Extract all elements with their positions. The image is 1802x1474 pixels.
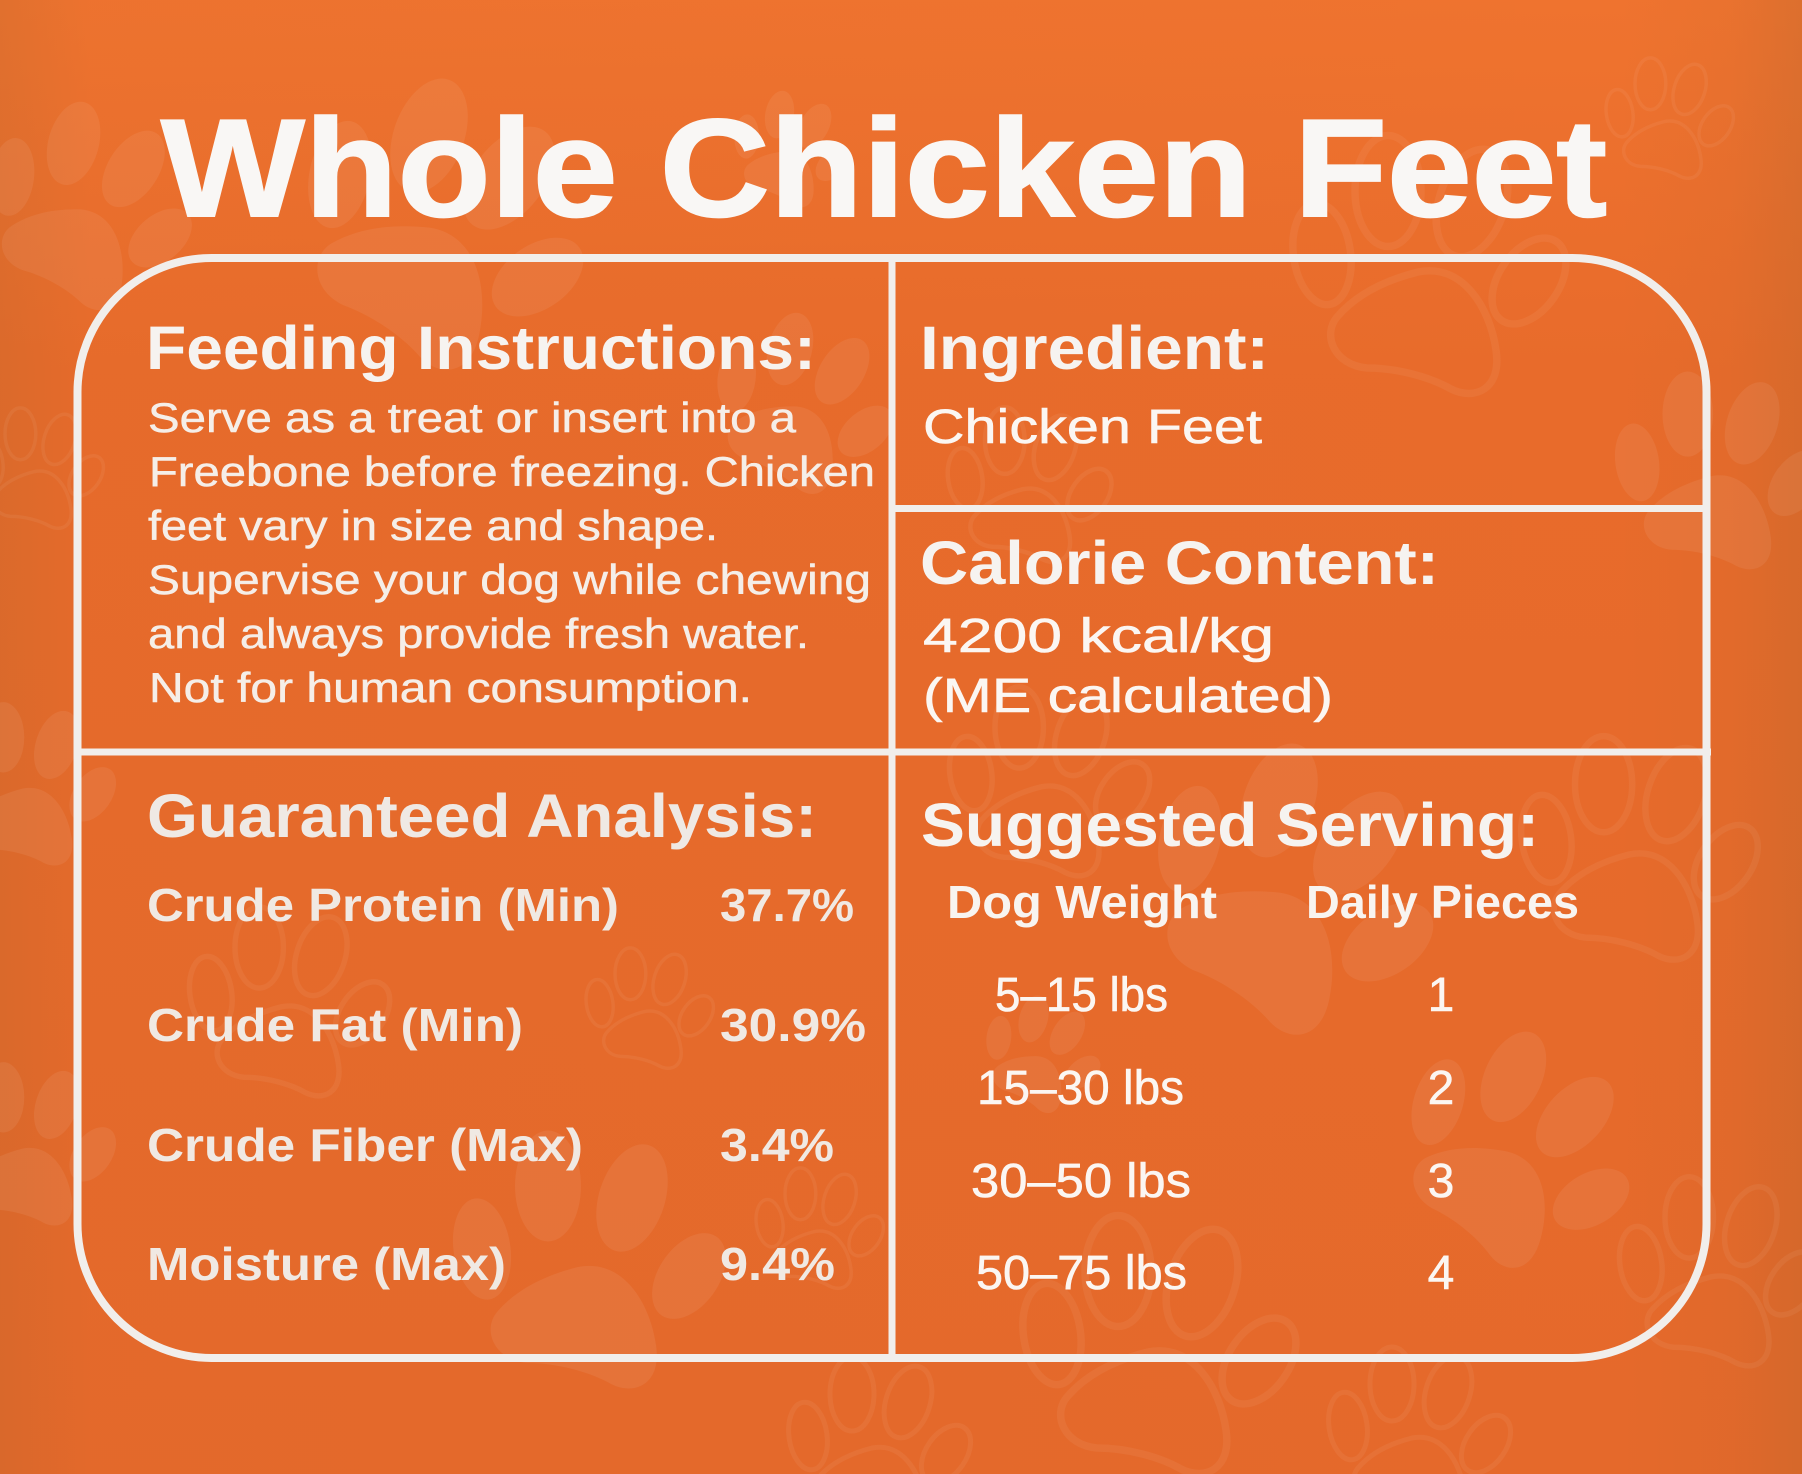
table row: 15-30 lbs (977, 1062, 1454, 1115)
row: moisture: 9.4% (720, 1238, 835, 1290)
table header: Dog Weight (947, 876, 1217, 928)
table row: 30-50 lbs (971, 1155, 1454, 1208)
panel: suggested serving (921, 791, 1579, 1300)
table row: 5-15 lbs: 5–15 lbs (995, 969, 1168, 1022)
table row: 5-15 lbs: 1 (1428, 969, 1454, 1022)
row: moisture (147, 1238, 835, 1290)
row: crude fiber (147, 1119, 834, 1171)
text block: feeding instructions body: and always provide fresh water. (148, 610, 809, 657)
text: chicken feet: Chicken Feet (923, 401, 1262, 454)
row: crude protein: 37.7% (720, 879, 854, 931)
table row: 50-75 lbs: 4 (1428, 1247, 1454, 1300)
title: Whole Chicken Feet (161, 91, 1607, 246)
panel: calorie content (920, 529, 1439, 723)
text block: feeding instructions body: Serve as a treat or insert into a (148, 394, 797, 441)
text block: feeding instructions body: Freebone before freezing. Chicken (149, 448, 875, 495)
text: calorie value (923, 610, 1333, 723)
table row: 50-75 lbs (976, 1247, 1454, 1300)
row: moisture: Moisture (Max) (147, 1238, 506, 1290)
heading: ingredient: Ingredient: (920, 314, 1269, 382)
table row: 30-50 lbs: 30–50 lbs (971, 1155, 1191, 1208)
row: crude fat (147, 999, 866, 1051)
panel frame (74, 258, 1711, 1358)
table header (947, 876, 1579, 928)
text block: feeding instructions body (148, 394, 875, 711)
table row: 50-75 lbs: 50–75 lbs (976, 1247, 1187, 1300)
heading: guaranteed analysis: Guaranteed Analysis: (147, 782, 817, 850)
heading: calorie content: Calorie Content: (920, 529, 1439, 597)
table row: 5-15 lbs (995, 969, 1454, 1022)
table row: 15-30 lbs: 15–30 lbs (977, 1062, 1184, 1115)
row: crude fiber: Crude Fiber (Max) (147, 1119, 583, 1171)
text: calorie value: (ME calculated) (923, 670, 1333, 723)
row: crude fat: Crude Fat (Min) (147, 999, 523, 1051)
row: crude protein: Crude Protein (Min) (147, 879, 619, 931)
text block: feeding instructions body: feet vary in size and shape. (148, 502, 718, 549)
panel: ingredient (920, 314, 1269, 454)
table row: 30-50 lbs: 3 (1428, 1155, 1454, 1208)
panel: feeding instructions (146, 314, 875, 711)
text: calorie value: 4200 kcal/kg (923, 610, 1274, 663)
text block: feeding instructions body: Not for human consumption. (149, 664, 752, 711)
row: crude fiber: 3.4% (720, 1119, 834, 1171)
heading: feeding instructions: Feeding Instructions: (146, 314, 816, 382)
text block: feeding instructions body: Supervise your dog while chewing (148, 556, 871, 603)
table row: 15-30 lbs: 2 (1428, 1062, 1454, 1115)
row: crude fat: 30.9% (720, 999, 866, 1051)
row: crude protein (147, 879, 854, 931)
table header: Daily Pieces (1306, 876, 1579, 928)
panel: guaranteed analysis (147, 782, 866, 1290)
heading: suggested serving: Suggested Serving: (921, 791, 1539, 859)
